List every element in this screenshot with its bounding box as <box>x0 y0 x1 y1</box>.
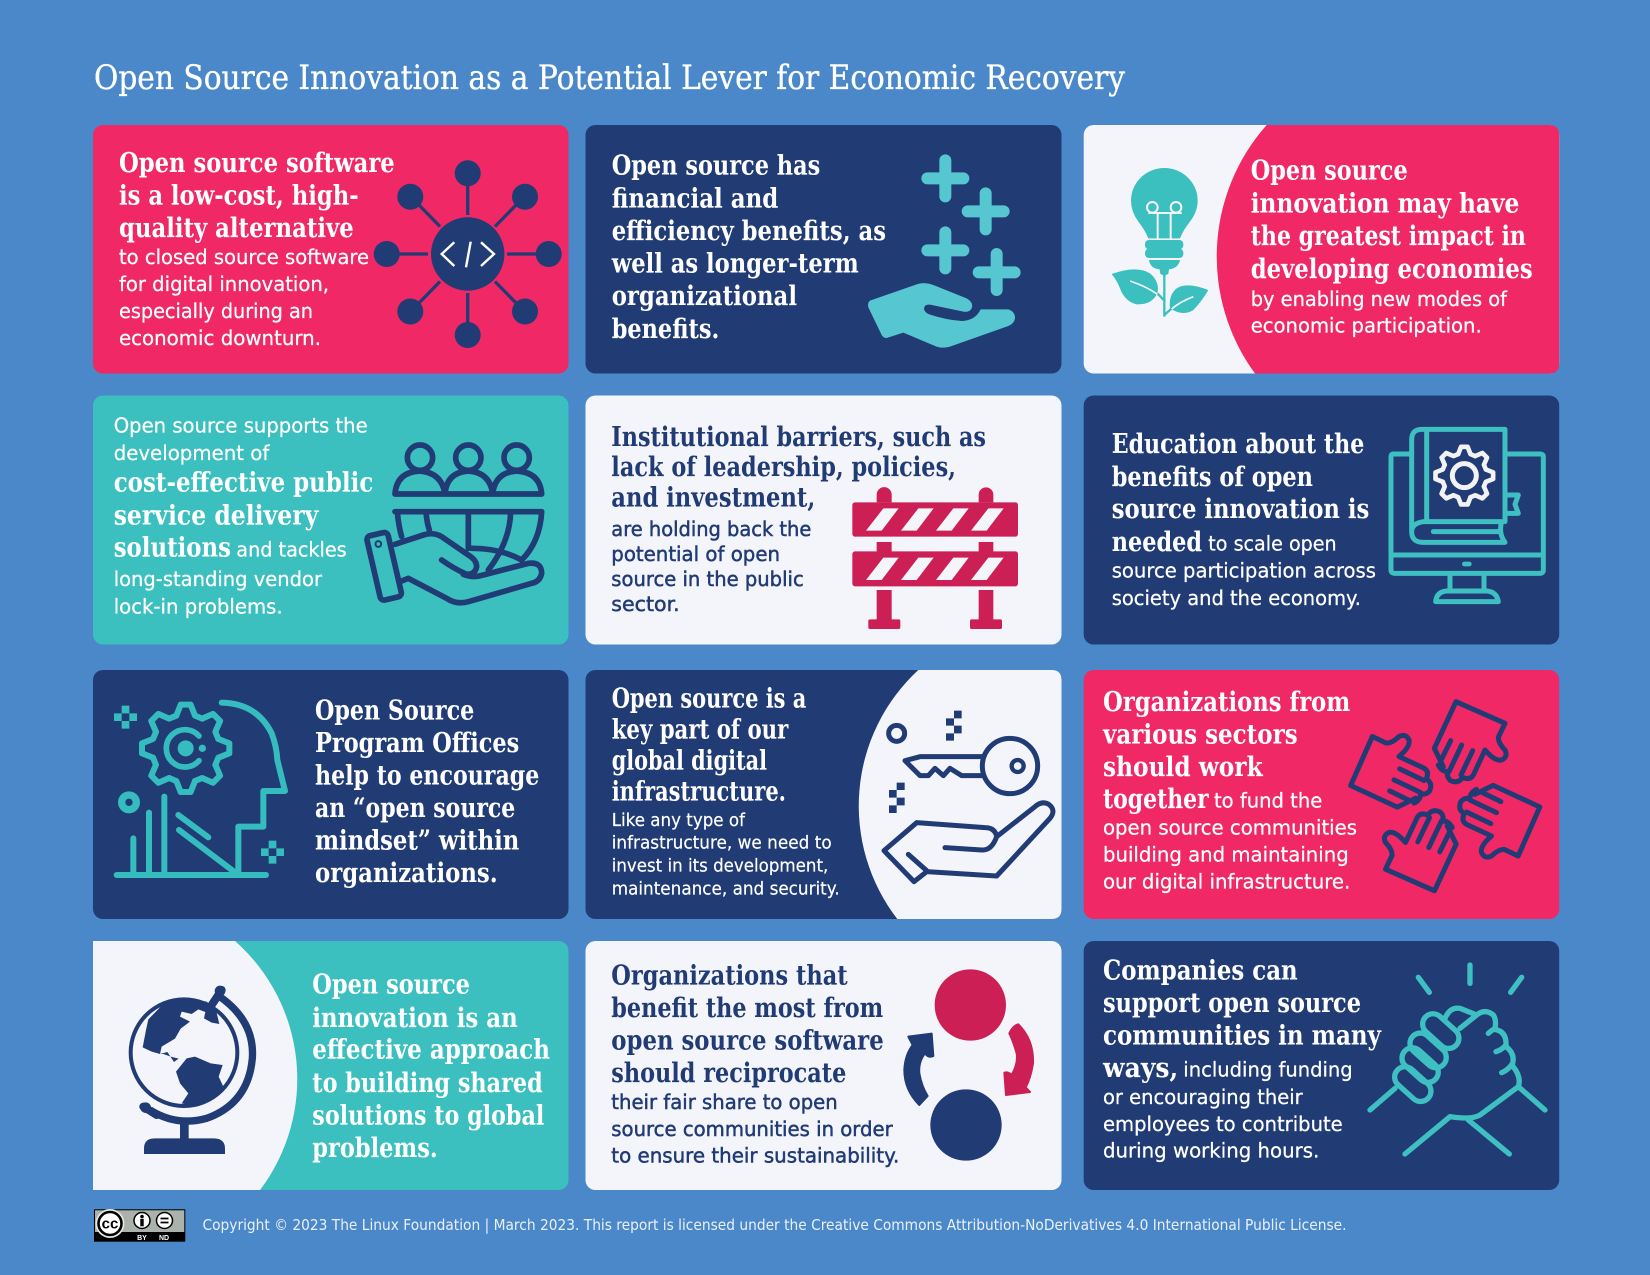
icon: desk globe <box>131 986 253 1154</box>
icon: head with gear <box>114 703 285 875</box>
panel: companies support <box>1084 941 1559 1190</box>
text block: public service delivery: long-standing vendor <box>114 567 323 591</box>
text block: global problems: solutions to global <box>312 1099 544 1131</box>
text block: developing economies: by enabling new modes of <box>1251 287 1508 311</box>
text block: education: Education about the <box>1112 428 1364 460</box>
text block: companies support: communities in many <box>1103 1019 1382 1051</box>
text block: companies support: support open source <box>1103 987 1361 1019</box>
panel: global problems <box>93 941 568 1190</box>
text block: reciprocate: to ensure their sustainability. <box>611 1144 899 1168</box>
panel: education <box>1084 396 1559 644</box>
text block: digital infrastructure: maintenance, and security. <box>612 879 840 899</box>
text block: organizations work together <box>1102 686 1357 893</box>
panel: institutional barriers <box>586 396 1062 644</box>
text block: public service delivery: cost-effective public <box>114 466 373 498</box>
text block: program offices: mindset” within <box>315 825 519 857</box>
text block: program offices: help to encourage <box>315 759 539 791</box>
text block: reciprocate: Organizations that <box>611 960 848 992</box>
text block: program offices <box>315 694 539 889</box>
text block: program offices: Open Source <box>315 694 474 726</box>
text block: companies support <box>1102 954 1382 1163</box>
text block: global problems: innovation is an <box>312 1002 518 1034</box>
icon: reciprocal cycle <box>904 969 1033 1161</box>
text block: digital infrastructure: global digital <box>612 744 767 776</box>
title: Open Source Innovation as a Potential Lever for Economic Recovery <box>94 58 1125 97</box>
text block: companies support: Companies can <box>1103 954 1298 986</box>
text block: public service delivery: development of <box>114 441 270 465</box>
text block: organizations work together: should work <box>1103 751 1263 783</box>
icon: road barrier <box>852 487 1018 629</box>
text block: public service delivery <box>114 414 373 619</box>
text block: reciprocate <box>611 960 899 1168</box>
text block: education: to scale open <box>1208 532 1337 556</box>
text block: public service delivery: lock-in problems. <box>114 595 283 619</box>
text block: organizations work together: open source communities <box>1103 815 1357 839</box>
text block: financial benefits: organizational <box>612 280 797 312</box>
text block: reciprocate: source communities in order <box>611 1117 893 1141</box>
text block: education: benefits of open <box>1112 461 1313 493</box>
text block: organizations work together: our digital infrastructure. <box>1103 869 1350 893</box>
text block: digital infrastructure: key part of our <box>612 713 789 745</box>
text block: companies support: employees to contribute <box>1103 1112 1343 1136</box>
panel: financial benefits <box>586 125 1062 374</box>
text block: public service delivery: service delivery <box>114 499 319 531</box>
text block: public service delivery: Open source supports the <box>114 414 368 438</box>
panel: organizations work together <box>1084 670 1559 919</box>
text block: financial benefits: Open source has <box>612 150 820 182</box>
text block: low-cost alternative <box>119 147 395 350</box>
text block: low-cost alternative: to closed source software <box>119 245 369 269</box>
text block: organizations work together: building and maintaining <box>1103 843 1349 867</box>
text block: digital infrastructure: Open source is a <box>612 683 806 715</box>
text block: reciprocate: benefit the most from <box>611 992 883 1024</box>
text block: low-cost alternative: especially during an <box>119 299 313 323</box>
text block: organizations work together: Organizations from <box>1103 686 1350 718</box>
text block: organizations work together: various sectors <box>1102 718 1298 750</box>
text block: program offices: Program Offices <box>315 727 519 759</box>
text block: digital infrastructure: infrastructure, we need to <box>612 834 832 854</box>
text block: digital infrastructure: Like any type of <box>612 811 746 831</box>
icon: code network <box>374 160 562 348</box>
text block: developing economies: the greatest impact in <box>1251 220 1526 252</box>
logo: Creative Commons BY-ND badge: BY <box>137 1235 147 1242</box>
text block: companies support: during working hours. <box>1103 1139 1319 1163</box>
icon: hand holding globe and people <box>366 445 542 603</box>
panel: reciprocate <box>586 941 1062 1190</box>
text block: institutional barriers: Institutional barriers, such as <box>611 421 986 453</box>
text block: developing economies: developing economies <box>1251 253 1533 285</box>
text block: digital infrastructure <box>612 683 840 899</box>
text block: financial benefits: financial and <box>612 182 778 214</box>
icon: hand with plus signs <box>868 160 1015 348</box>
text block: organizations work together: together <box>1103 783 1209 815</box>
icon: hand with key <box>884 711 1053 882</box>
text block: institutional barriers: sector. <box>611 592 680 616</box>
text block: education: needed <box>1112 526 1202 558</box>
text block: reciprocate: open source software <box>611 1025 884 1057</box>
text block: institutional barriers: and investment, <box>611 481 815 513</box>
text block: education: source participation across <box>1112 559 1376 583</box>
text block: companies support: ways, <box>1102 1052 1178 1084</box>
text block: financial benefits <box>611 150 886 345</box>
logo: Creative Commons BY-ND badge <box>94 1209 185 1242</box>
text block: financial benefits: benefits. <box>612 313 719 345</box>
text block: institutional barriers: lack of leadership, policies, <box>611 451 956 483</box>
text block: global problems: effective approach <box>312 1034 550 1066</box>
text block: reciprocate: their fair share to open <box>611 1090 838 1114</box>
panel: program offices <box>93 670 568 919</box>
text block: developing economies: innovation may have <box>1251 188 1519 220</box>
icon: light bulb plant <box>1112 168 1208 317</box>
panel: developing economies <box>1084 125 1559 374</box>
icon: book on monitor with gear <box>1391 429 1543 602</box>
icon: handshake grip <box>1370 965 1545 1154</box>
text block: companies support: or encouraging their <box>1103 1085 1303 1109</box>
text block: low-cost alternative: Open source software <box>119 147 395 179</box>
panel: low-cost alternative <box>93 125 568 374</box>
footer copyright: Copyright © 2023 The Linux Foundation | March 2023. This report is licensed under the Creative Commons Attribution-NoDerivatives 4.0 International Public License. <box>202 1216 1346 1234</box>
text block: financial benefits: well as longer-term <box>611 248 859 280</box>
text block: institutional barriers <box>611 421 986 616</box>
text block: global problems <box>312 969 550 1164</box>
text block: institutional barriers: source in the public <box>611 567 804 591</box>
text block: financial benefits: efficiency benefits, as <box>612 215 886 247</box>
panel: public service delivery <box>93 396 568 644</box>
text block: global problems: Open source <box>312 969 470 1001</box>
text block: public service delivery: solutions <box>114 532 231 564</box>
text block: institutional barriers: potential of open <box>611 542 780 566</box>
text block: organizations work together: to fund the <box>1214 788 1322 812</box>
text block: global problems: problems. <box>312 1132 438 1164</box>
icon: four hands <box>1351 702 1540 891</box>
panel: digital infrastructure <box>586 670 1062 919</box>
logo: Creative Commons BY-ND badge: ND <box>159 1235 169 1242</box>
text block: developing economies: Open source <box>1251 155 1408 187</box>
text block: low-cost alternative: is a low-cost, high- <box>119 179 359 211</box>
text block: institutional barriers: are holding back the <box>611 517 811 541</box>
text block: education <box>1112 428 1376 610</box>
text block: low-cost alternative: economic downturn. <box>119 326 321 350</box>
text block: developing economies: economic participation. <box>1251 314 1482 338</box>
text block: low-cost alternative: quality alternative <box>119 212 354 244</box>
text block: education: source innovation is <box>1112 493 1369 525</box>
text block: reciprocate: should reciprocate <box>611 1057 846 1089</box>
text block: program offices: organizations. <box>315 857 498 889</box>
text block: public service delivery: and tackles <box>236 537 347 561</box>
text block: digital infrastructure: infrastructure. <box>612 775 786 807</box>
text block: global problems: to building shared <box>312 1067 543 1099</box>
text block: education: society and the economy. <box>1112 586 1361 610</box>
text block: developing economies <box>1251 155 1533 338</box>
logo: Creative Commons BY-ND badge: cc <box>102 1216 118 1232</box>
text block: digital infrastructure: invest in its development, <box>612 857 828 877</box>
text block: companies support: including funding <box>1183 1058 1353 1082</box>
text block: low-cost alternative: for digital innovation, <box>119 272 329 296</box>
text block: program offices: an “open source <box>315 792 515 824</box>
